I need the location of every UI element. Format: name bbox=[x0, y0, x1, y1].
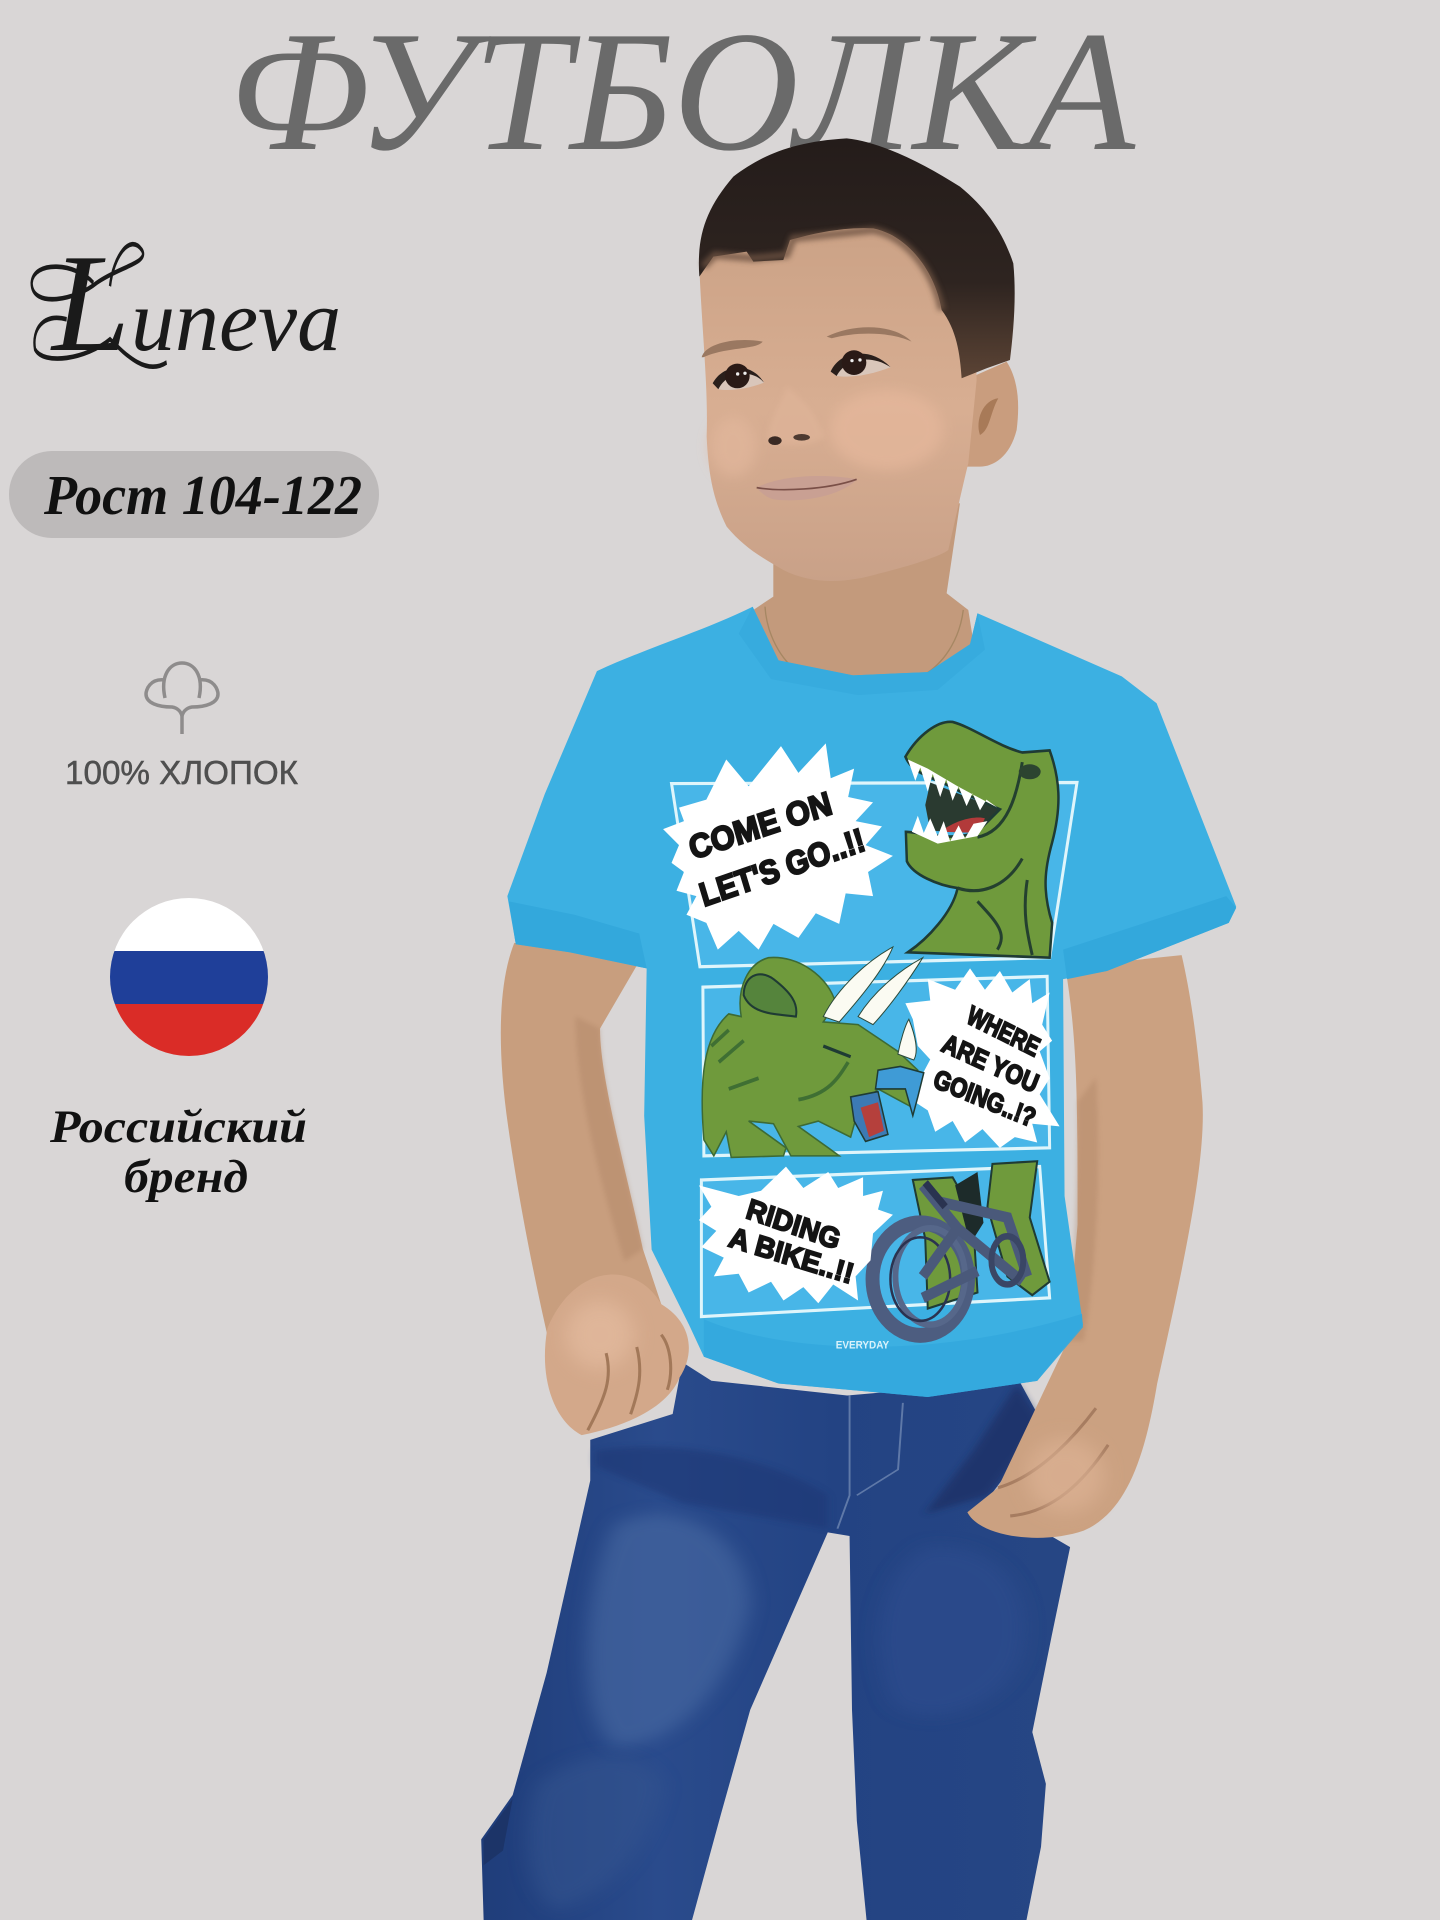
speech bubble 3: RIDING bbox=[743, 1193, 844, 1256]
russian brand text: бренд bbox=[124, 1151, 248, 1203]
speech bubble 2: GOING..!? bbox=[930, 1065, 1039, 1133]
left hand bbox=[545, 1274, 689, 1435]
title: ФУТБОЛКА bbox=[229, 0, 1136, 187]
shirt body bbox=[507, 607, 1236, 1397]
nose bbox=[767, 387, 825, 445]
cotton label: 100% ХЛОПОК bbox=[65, 754, 299, 791]
eyebrows bbox=[702, 340, 763, 357]
speech bubble 1: LET'S GO..!! bbox=[695, 821, 869, 914]
boy photo illustration bbox=[481, 138, 1236, 1920]
jeans bbox=[481, 1362, 1070, 1920]
speech bubble 3 bbox=[699, 1167, 893, 1303]
print small caption: EVERYDAY bbox=[836, 1340, 889, 1352]
t-rex legs on bike bbox=[913, 1161, 1050, 1309]
icon: russian flag bbox=[110, 898, 268, 1057]
comic panel frames bbox=[672, 782, 1077, 1317]
face bbox=[699, 197, 977, 581]
triceratops bbox=[702, 947, 924, 1157]
speech bubble 1 bbox=[663, 743, 893, 950]
icon: cotton bbox=[146, 663, 218, 734]
t-shirt with dinosaur print bbox=[507, 607, 1236, 1397]
t-rex bbox=[905, 722, 1058, 958]
brand logo: L bbox=[50, 226, 130, 381]
speech bubble 2: WHERE bbox=[963, 1001, 1044, 1063]
eyes bbox=[713, 368, 764, 390]
left arm bbox=[501, 943, 661, 1335]
head bbox=[699, 138, 1018, 581]
height pill bbox=[9, 451, 379, 538]
bicycle bbox=[873, 1183, 1027, 1335]
russian brand text bbox=[49, 1101, 307, 1203]
speech bubble 2 bbox=[905, 968, 1060, 1148]
right arm and hand bbox=[967, 955, 1203, 1538]
ear bbox=[965, 362, 1018, 467]
neck bbox=[750, 503, 980, 683]
speech bubble 1: COME ON bbox=[685, 785, 836, 867]
speech bubble 2: ARE YOU bbox=[938, 1029, 1042, 1099]
mouth bbox=[757, 476, 857, 500]
speech bubble 3: A BIKE..!! bbox=[726, 1221, 857, 1290]
height pill: Рост 104-122 bbox=[43, 465, 362, 527]
brand logo bbox=[32, 226, 341, 381]
brand logo: uneva bbox=[131, 273, 341, 370]
hair bbox=[699, 138, 1015, 378]
russian brand text: Российский bbox=[49, 1101, 307, 1153]
